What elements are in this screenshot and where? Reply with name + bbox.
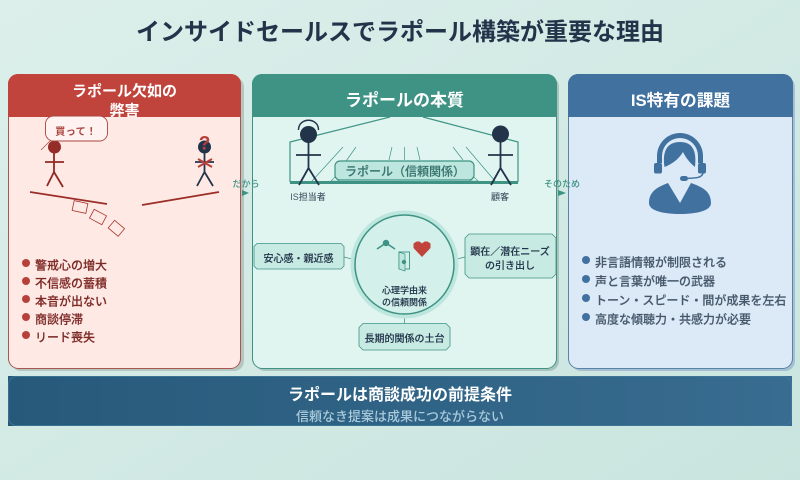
arrow: for that reason: そのため: [544, 179, 580, 189]
panel header: essence of rapport: [252, 74, 557, 117]
illustration: IS representative: [296, 120, 321, 185]
panel: IS-specific challenges: [568, 74, 795, 371]
panel header: essence of rapport: ラポールの本質: [345, 90, 464, 110]
list: harms: 警戒心の増大: [35, 258, 107, 272]
bottom banner: 信頼なき提案は成果につながらない: [296, 409, 504, 424]
list: harms: [22, 258, 107, 344]
panel header: IS-specific challenges: [568, 74, 793, 117]
label: IS representative: IS担当者: [290, 191, 326, 202]
box: sense of safety: [254, 244, 344, 269]
box: foundation for long-term relationship: [359, 324, 450, 350]
box: eliciting needs: [465, 234, 556, 278]
list: harms: 本音が出ない: [35, 294, 107, 308]
arrow: therefore: [232, 179, 260, 196]
bottom banner: [8, 376, 792, 426]
list: challenges: 非言語情報が制限される: [595, 254, 727, 270]
box: eliciting needs: の引き出し: [485, 259, 535, 272]
panel header: IS-specific challenges: IS特有の課題: [631, 91, 730, 110]
rapport label: [335, 161, 474, 180]
list: challenges: [582, 254, 786, 326]
panel header: rapport deficiency: 弊害: [109, 102, 140, 120]
list: harms: 不信感の蓄積: [35, 276, 107, 290]
panel header: rapport deficiency: [8, 74, 241, 120]
list: challenges: 高度な傾聴力・共感力が必要: [595, 312, 751, 326]
illustration: pushy salesperson: [41, 116, 108, 187]
icon: headset operator: [649, 133, 711, 214]
icon: open door: [399, 252, 410, 271]
bottom banner: ラポールは商談成功の前提条件: [288, 385, 512, 404]
illustration: wary customer: [195, 134, 214, 186]
panel: essence of rapport: [252, 74, 559, 371]
arrow: for that reason: [544, 179, 580, 196]
box: eliciting needs: 顕在／潜在ニーズ: [470, 245, 550, 258]
box: sense of safety: 安心感・親近感: [264, 252, 334, 265]
circle label: の信頼関係: [382, 296, 427, 308]
panel: rapport deficiency: [8, 74, 244, 371]
illustration: broken bridge and falling blocks: [30, 192, 219, 236]
icon: handshake: [377, 240, 395, 249]
illustration: rapport bridge: [290, 117, 518, 184]
connector lines: [344, 257, 465, 323]
title: インサイドセールスでラポール構築が重要な理由: [136, 18, 664, 46]
list: harms: リード喪失: [35, 330, 95, 344]
box: foundation for long-term relationship: 長期的関係の土台: [364, 332, 444, 345]
illustration: wary customer: ?: [199, 134, 210, 154]
circle: psychology-based trust: [350, 210, 458, 318]
icon: heart: [414, 242, 430, 257]
circle label: [382, 284, 427, 308]
speech bubble: 買って！: [55, 126, 97, 138]
list: challenges: トーン・スピード・間が成果を左右: [595, 292, 786, 308]
label: customer: 顧客: [491, 191, 509, 202]
arrow: therefore: だから: [232, 179, 260, 189]
circle label: 心理学由来: [382, 284, 427, 296]
list: harms: 商談停滞: [35, 312, 83, 326]
panel header: rapport deficiency: ラポール欠如の: [72, 82, 177, 100]
list: challenges: 声と言葉が唯一の武器: [595, 274, 715, 288]
rapport label: ラポール（信頼関係）: [345, 164, 465, 178]
illustration: customer: [488, 126, 513, 185]
